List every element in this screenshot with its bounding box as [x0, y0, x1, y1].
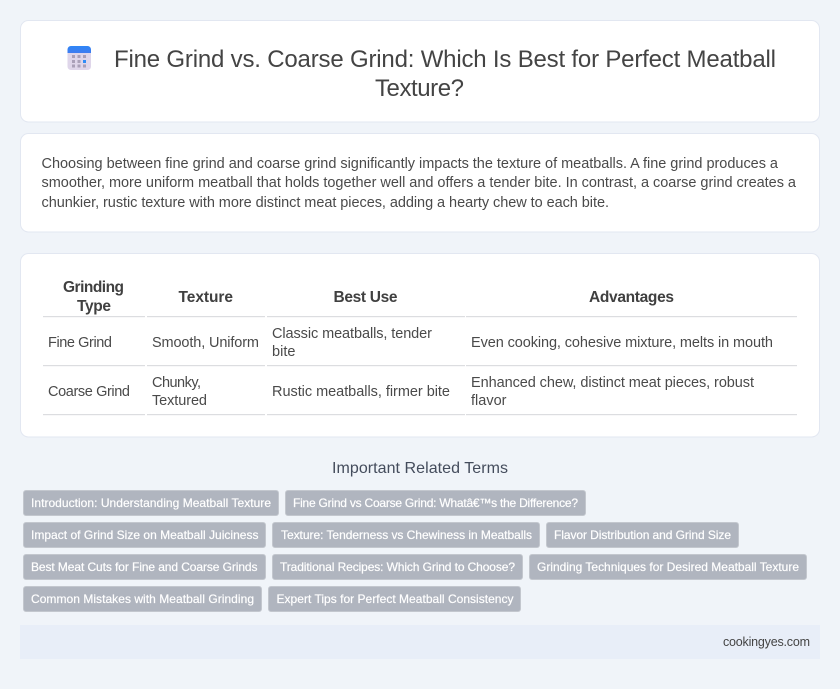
title text: Fine Grind vs. Coarse Grind: Which Is Best for Perfect Meatball — [114, 46, 776, 73]
tag: Flavor Distribution and Grind Size — [554, 528, 731, 542]
row: coarse grind: flavor — [471, 393, 507, 409]
table panel — [20, 254, 820, 437]
tag — [546, 522, 738, 548]
tag — [24, 554, 266, 580]
row: fine grind: Smooth, Uniform — [152, 335, 259, 351]
tag — [24, 490, 278, 516]
related terms heading: Important Related Terms — [332, 460, 508, 477]
tag — [272, 554, 522, 580]
row: fine grind: Classic meatballs, tender — [272, 326, 432, 342]
table header: Texture — [178, 289, 233, 306]
tag: Introduction: Understanding Meatball Texture — [31, 496, 271, 510]
footer — [20, 625, 820, 659]
tag — [272, 522, 540, 548]
table header: Best Use — [334, 289, 398, 306]
table header: Grinding — [63, 279, 124, 296]
title panel — [20, 20, 820, 122]
title text — [114, 46, 776, 102]
intro text: Choosing between fine grind and coarse grind significantly impacts the texture of meatballs. A fine grind produces a — [42, 156, 779, 172]
tag: Impact of Grind Size on Meatball Juiciness — [31, 528, 258, 542]
row: fine grind — [48, 326, 773, 360]
table rules — [43, 316, 797, 415]
tag: Common Mistakes with Meatball Grinding — [31, 592, 254, 606]
tag: Best Meat Cuts for Fine and Coarse Grinds — [31, 560, 258, 574]
row: coarse grind — [48, 375, 754, 409]
related terms tags — [24, 490, 806, 612]
intro text — [42, 156, 797, 211]
intro text: chunkier, rustic texture with more distinct meat pieces, adding a hearty chew to each bite. — [42, 195, 609, 211]
row: fine grind: Even cooking, cohesive mixture, melts in mouth — [471, 335, 773, 351]
tag — [268, 586, 520, 612]
tag: Grinding Techniques for Desired Meatball Texture — [537, 560, 799, 574]
title text: Texture? — [375, 75, 464, 102]
intro text: smoother, more uniform meatball that holds together well and offers a tender bite. In contrast, a coarse grind creates a — [42, 175, 797, 191]
table header — [63, 279, 674, 315]
table header: Type — [77, 298, 111, 315]
row: coarse grind: Enhanced chew, distinct meat pieces, robust — [471, 375, 754, 391]
table header: Advantages — [589, 289, 674, 306]
tag: Expert Tips for Perfect Meatball Consistency — [276, 592, 514, 606]
row: coarse grind: Coarse Grind — [48, 384, 130, 400]
footer: cookingyes.com — [723, 635, 810, 649]
row: fine grind: Fine Grind — [48, 335, 112, 351]
row: coarse grind: Textured — [152, 393, 207, 409]
tag: Texture: Tenderness vs Chewiness in Meatballs — [281, 528, 532, 542]
tag: Traditional Recipes: Which Grind to Choose? — [280, 560, 515, 574]
tag — [24, 586, 262, 612]
row: coarse grind: Chunky, — [152, 375, 201, 391]
intro panel — [20, 134, 820, 232]
icon: calendar — [68, 46, 91, 70]
tag — [286, 490, 586, 516]
tag: Fine Grind vs Coarse Grind: Whatâ€™s the Difference? — [293, 496, 578, 510]
tag — [530, 554, 806, 580]
tag — [24, 522, 266, 548]
row: coarse grind: Rustic meatballs, firmer bite — [272, 384, 450, 400]
row: fine grind: bite — [272, 344, 296, 360]
